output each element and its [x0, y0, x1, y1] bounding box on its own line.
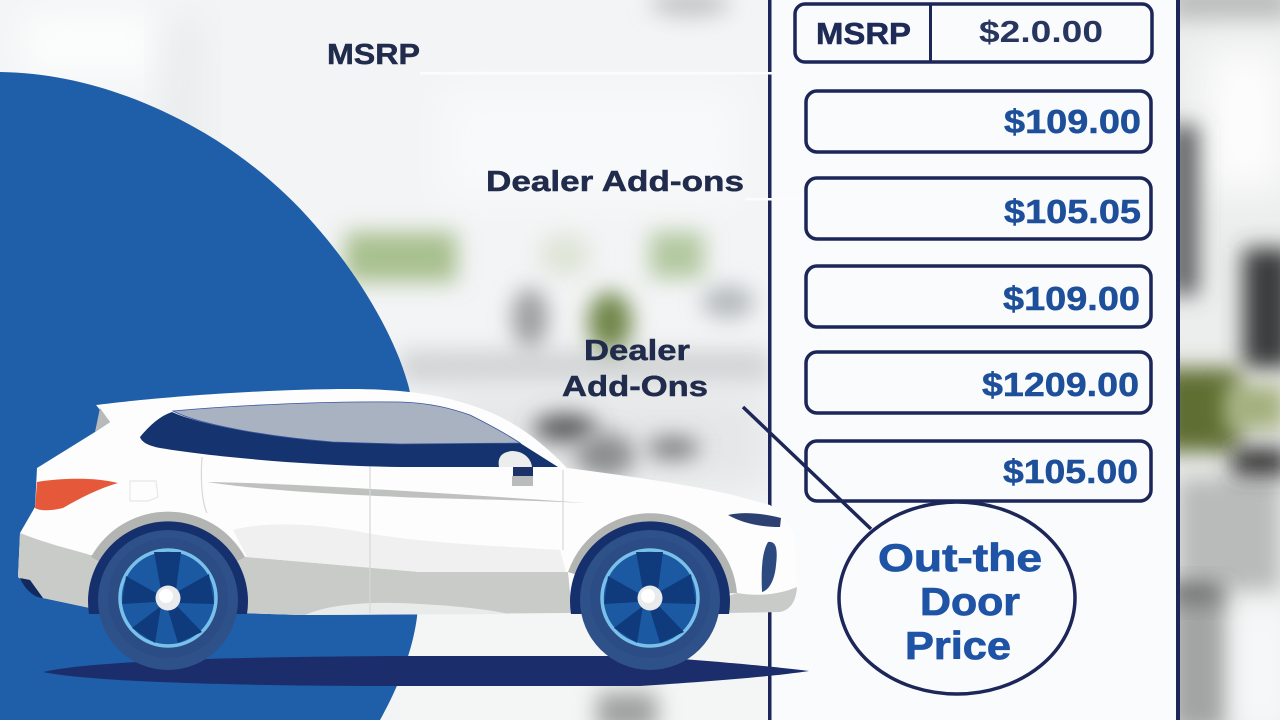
- row: price 5: [806, 441, 1151, 501]
- wheel arches: [91, 512, 245, 598]
- fuel cap: [130, 481, 158, 501]
- callout: Out-the-Door Price: [839, 502, 1075, 694]
- row: price 5: $105.00: [1003, 453, 1138, 490]
- panel: price sheet: [768, 0, 1180, 720]
- rear pillar accent: [95, 408, 110, 432]
- arrow: connector to out-the-door callout: [743, 407, 871, 529]
- row: price 1: $109.00: [1004, 103, 1141, 140]
- character line: [207, 482, 587, 503]
- callout: Out-the-Door Price: Price: [905, 625, 1011, 668]
- tail light: [35, 479, 118, 510]
- row: MSRP price: MSRP: [816, 16, 911, 51]
- side highlight: [233, 524, 566, 572]
- row: MSRP price: [795, 4, 1152, 62]
- row: price 2: $105.05: [1004, 193, 1141, 230]
- window glass: [173, 402, 520, 444]
- front wheel: [580, 530, 720, 670]
- label: MSRP: MSRP: [327, 39, 420, 71]
- row: price 4: [806, 352, 1151, 413]
- row: price 2: [806, 178, 1151, 239]
- windows dark: [140, 412, 558, 467]
- headlight: [728, 513, 781, 527]
- label: Dealer Add-Ons stacked: Dealer: [584, 335, 690, 367]
- callout: Out-the-Door Price: Out-the: [878, 537, 1042, 580]
- row: MSRP price: $2.0.00: [979, 14, 1103, 49]
- mirror: [499, 451, 533, 486]
- car body: [18, 389, 797, 615]
- callout: Out-the-Door Price: Door: [920, 581, 1020, 624]
- row: price 4: $1209.00: [982, 366, 1139, 403]
- label: Dealer Add-ons: Dealer Add-ons: [486, 166, 744, 198]
- label: Dealer Add-Ons stacked: [562, 335, 708, 403]
- label: Dealer Add-Ons stacked: Add-Ons: [562, 371, 708, 403]
- blue circle backdrop: [0, 72, 420, 720]
- lower body shading: [18, 533, 572, 615]
- row: price 1: [806, 91, 1151, 152]
- ground shadow: [43, 656, 809, 686]
- front grille: [762, 542, 777, 592]
- row: price 3: $109.00: [1003, 280, 1140, 317]
- illustration: white SUV: [18, 389, 797, 670]
- front bumper shade: [728, 587, 797, 613]
- door seams: [201, 457, 563, 613]
- rear bumper dark: [20, 578, 43, 598]
- row: price 3: [806, 266, 1151, 327]
- rear wheel: [98, 530, 238, 670]
